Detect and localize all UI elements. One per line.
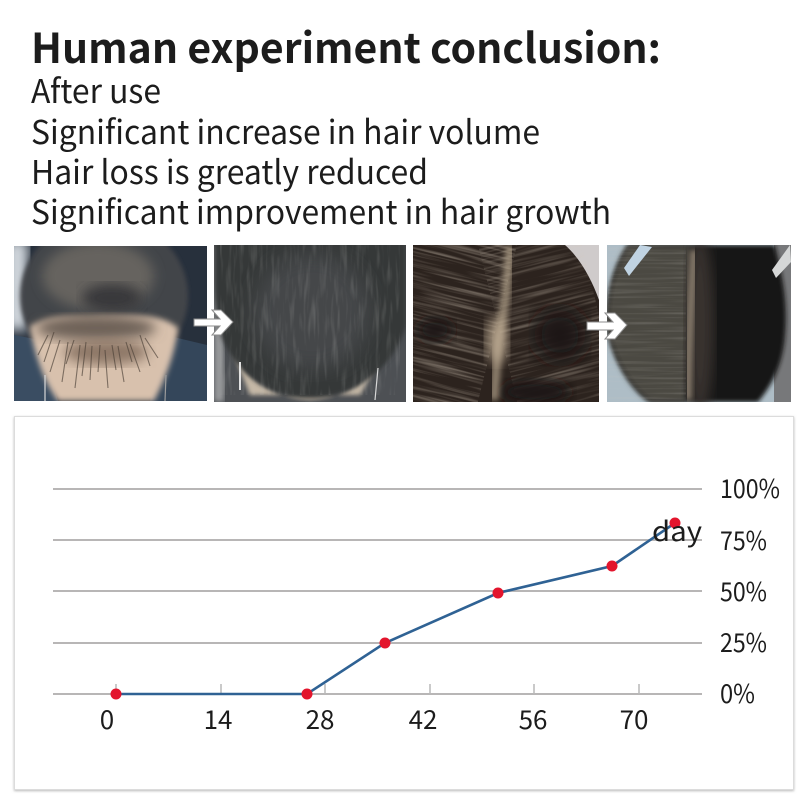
x axis labels: 42 — [409, 700, 437, 737]
line: after use: After use — [31, 65, 161, 113]
chart gridlines — [53, 489, 702, 694]
y axis labels — [720, 469, 780, 711]
line: hair volume: Significant increase in hair volume — [31, 106, 540, 154]
title: Human experiment conclusion: — [31, 15, 661, 75]
chart line: hair growth — [116, 523, 675, 694]
panel: growth chart — [14, 416, 794, 790]
x axis labels: 70 — [620, 700, 648, 737]
x axis labels: 28 — [306, 700, 334, 737]
chart data points — [110, 518, 680, 700]
photo: thick hair after — [214, 240, 406, 402]
photo: thinning parting before — [413, 245, 599, 402]
arrow: first pair — [194, 310, 233, 335]
line: hair loss: Hair loss is greatly reduced — [31, 146, 428, 194]
x axis labels: 56 — [519, 700, 547, 737]
x axis labels: 0 — [100, 700, 114, 737]
y axis labels: 50% — [720, 572, 767, 609]
line: hair growth: Significant improvement in hair growth — [31, 186, 611, 234]
y axis labels: 75% — [720, 521, 767, 558]
x axis labels: 14 — [204, 700, 232, 737]
photo: parting after — [607, 245, 791, 402]
axis unit label: day — [652, 510, 702, 549]
photo: balding crown before — [14, 246, 207, 401]
y axis labels: 0% — [720, 674, 755, 711]
arrow: second pair — [587, 313, 627, 339]
y axis labels: 25% — [720, 623, 767, 660]
text block: conclusions — [31, 65, 611, 234]
x axis labels — [100, 700, 648, 737]
y axis labels: 100% — [720, 469, 780, 506]
